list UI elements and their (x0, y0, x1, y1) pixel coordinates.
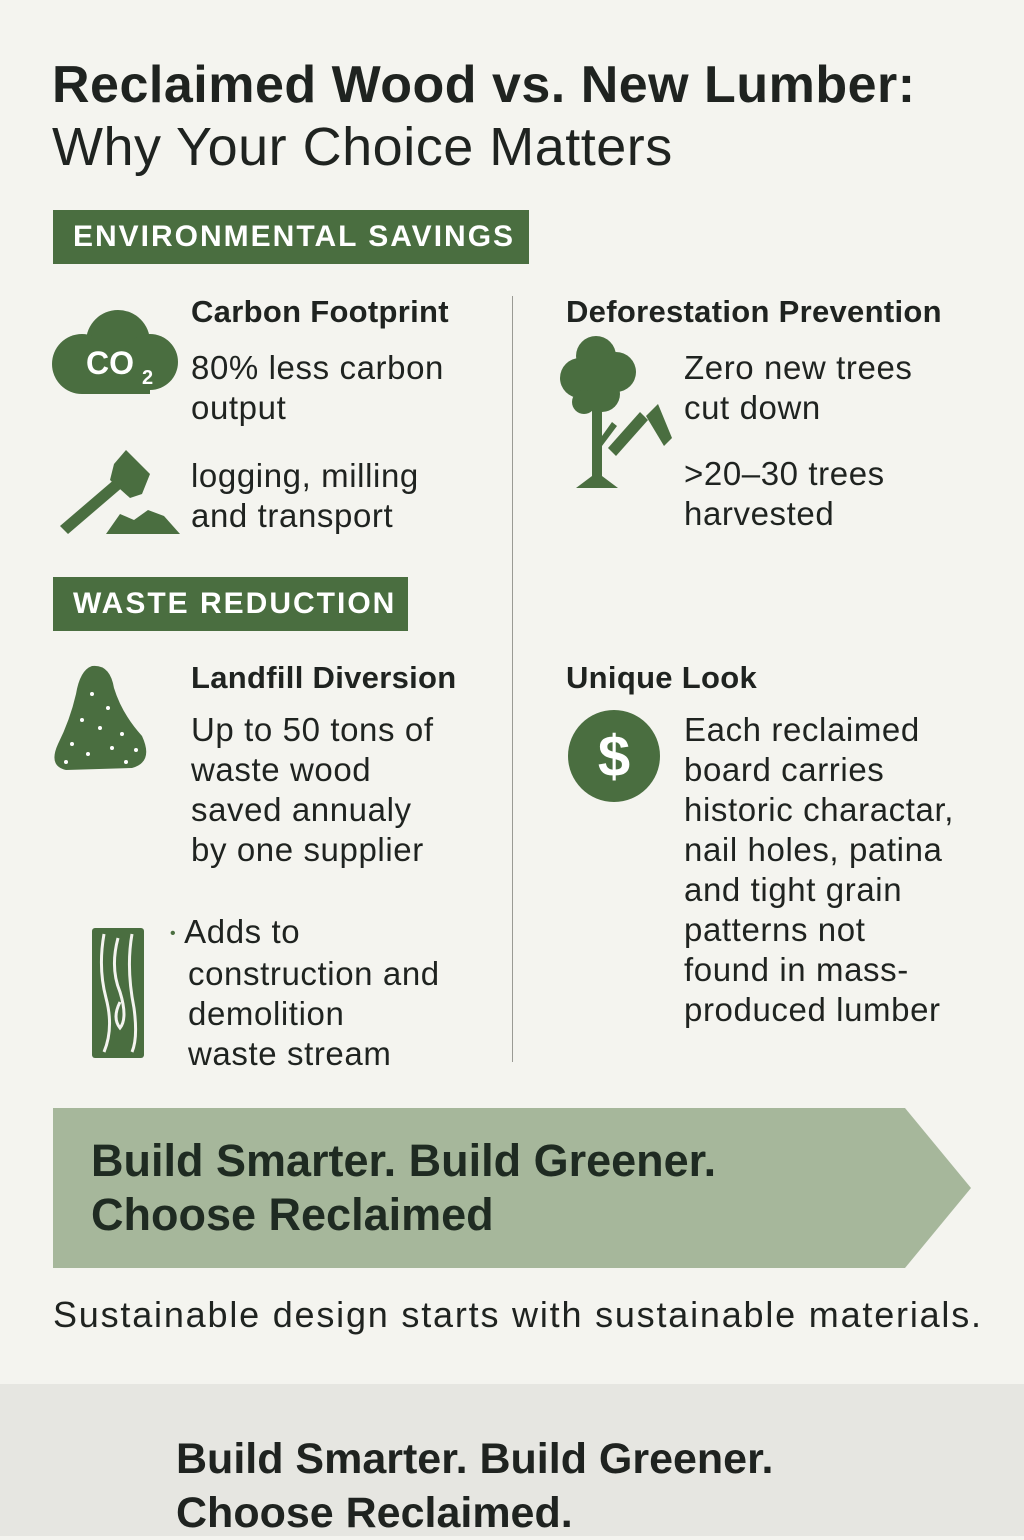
icon: CO2 cloud (52, 310, 178, 394)
panel: landfill diversion (54, 660, 456, 1072)
title: Why Your Choice Matters (52, 117, 673, 177)
badge: waste reduction (53, 577, 408, 631)
text: >20–30 trees (684, 455, 885, 492)
banner text: Build Smarter. Build Greener. (91, 1135, 716, 1186)
heading: Landfill Diversion (191, 660, 456, 695)
title: Reclaimed Wood vs. New Lumber: (52, 56, 916, 114)
text: • Adds to (170, 913, 300, 950)
text: patterns not (684, 911, 865, 948)
divider line (512, 296, 513, 1062)
icon: CO2 cloud: 2 (142, 367, 153, 389)
footer (0, 1384, 1024, 1536)
text: historic charactar, (684, 791, 954, 828)
text: Zero new trees (684, 349, 912, 386)
badge: environmental savings (53, 210, 529, 264)
text: and transport (191, 497, 393, 534)
banner text (91, 1135, 716, 1240)
footer text (176, 1435, 773, 1537)
badge: environmental savings: ENVIRONMENTAL SAVINGS (73, 220, 515, 253)
text: Up to 50 tons of (191, 711, 434, 748)
panel: deforestation (560, 294, 942, 532)
text (684, 455, 885, 532)
badge: waste reduction: WASTE REDUCTION (73, 587, 396, 620)
title (52, 56, 916, 177)
text (191, 711, 434, 868)
text: waste stream (188, 1035, 391, 1072)
text: produced lumber (684, 991, 941, 1028)
text: harvested (684, 495, 834, 532)
heading: Unique Look (566, 660, 757, 695)
text: waste wood (191, 751, 371, 788)
text: logging, milling (191, 457, 419, 494)
text (170, 913, 440, 1072)
text: output (191, 389, 286, 426)
text (191, 349, 444, 426)
text: demolition (188, 995, 344, 1032)
text (684, 349, 912, 426)
icon: wood plank (92, 928, 144, 1058)
panel: carbon footprint (52, 294, 449, 534)
icon: landfill pile (54, 666, 146, 770)
panel: unique look (566, 660, 954, 1028)
icon: CO2 cloud: CO (86, 345, 134, 381)
icon: dollar circle (568, 710, 660, 802)
text: Each reclaimed (684, 711, 920, 748)
text: found in mass- (684, 951, 909, 988)
text (191, 457, 419, 534)
footer text: Choose Reclaimed. (176, 1489, 573, 1537)
text: board carries (684, 751, 884, 788)
text: cut down (684, 389, 821, 426)
text: 80% less carbon (191, 349, 444, 386)
text: by one supplier (191, 831, 424, 868)
footer text: Build Smarter. Build Greener. (176, 1435, 773, 1483)
text: and tight grain (684, 871, 902, 908)
banner arrow (53, 1108, 971, 1268)
icon: tree with axe (560, 336, 672, 488)
tagline: Sustainable design starts with sustainable materials. (53, 1294, 983, 1335)
icon: dollar circle: $ (598, 724, 630, 789)
text: construction and (188, 955, 440, 992)
heading: Carbon Footprint (191, 294, 449, 329)
text (684, 711, 954, 1028)
banner text: Choose Reclaimed (91, 1189, 494, 1240)
text: nail holes, patina (684, 831, 942, 868)
text: saved annualy (191, 791, 412, 828)
heading: Deforestation Prevention (566, 294, 942, 329)
icon: axe (60, 450, 180, 534)
